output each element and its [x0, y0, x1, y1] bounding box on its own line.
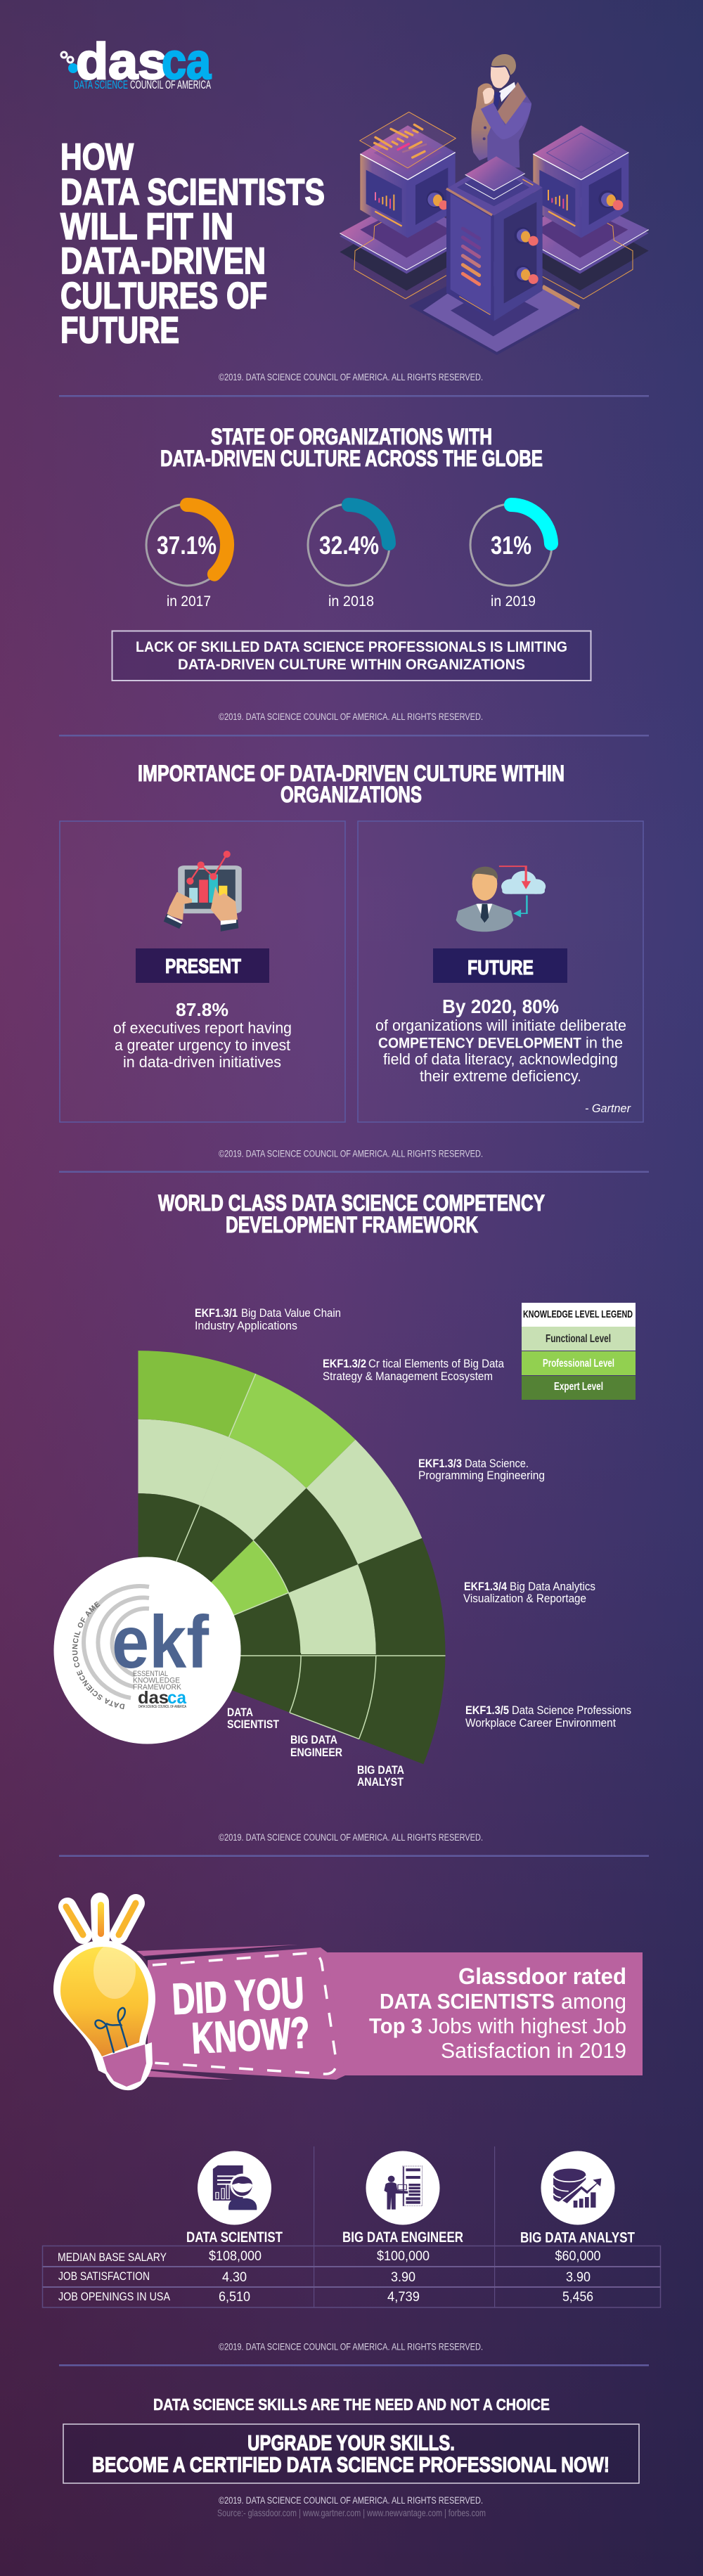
- heading: state of organizations: DATA-DRIVEN CULTURE ACROSS THE GLOBE: [160, 446, 543, 471]
- title: WILL FIT IN: [60, 206, 233, 247]
- sector: EKF1.3/3: [188, 1440, 422, 1628]
- donut: 2017: in 2017: [167, 593, 211, 610]
- did you know text: KNOW?: [191, 2009, 311, 2063]
- table: job comparison: JOB SATISFACTION: [58, 2269, 150, 2283]
- sector: EKF1.3/1: [138, 1351, 256, 1590]
- label: EKF1.3/5: EKF1.3/5: [465, 1704, 509, 1717]
- tagline: DATA SCIENCE SKILLS ARE THE NEED AND NOT A CHOICE: [153, 2395, 550, 2414]
- role labels: BIG DATA: [290, 1733, 337, 1746]
- label: EKF1.3/3: [418, 1457, 545, 1482]
- callout: lack of skilled professionals: LACK OF SKILLED DATA SCIENCE PROFESSIONALS IS LIMITING: [136, 639, 567, 655]
- stat: by 2020, 80%: field of data literacy, acknowledging: [383, 1050, 618, 1068]
- call to action: UPGRADE YOUR SKILLS.: [247, 2430, 455, 2455]
- label: EKF1.3/2: [323, 1358, 505, 1383]
- badge: ekf logo: KNOWLEDGE: [133, 1676, 180, 1685]
- stat: 87.8%: [113, 999, 292, 1071]
- stat: by 2020, 80%: in the: [586, 1033, 623, 1052]
- logo: dasca: ca: [162, 34, 212, 90]
- role labels: SCIENTIST: [227, 1718, 280, 1731]
- callout: lack of skilled professionals: DATA-DRIVEN CULTURE WITHIN ORGANIZATIONS: [178, 657, 525, 673]
- label: EKF1.3/5: Data Science Professions: [512, 1704, 631, 1717]
- label: EKF1.3/5: [465, 1704, 631, 1730]
- right tower: [533, 125, 628, 238]
- role labels: ANALYST: [357, 1775, 404, 1789]
- icon: data scientist: [198, 2151, 271, 2224]
- table: job comparison: $60,000: [555, 2249, 600, 2264]
- fact text: Satisfaction in 2019: [441, 2038, 626, 2063]
- speed lines: [136, 1945, 298, 2080]
- legend: knowledge level: Functional Level: [546, 1333, 611, 1345]
- column headings: BIG DATA ANALYST: [520, 2230, 635, 2246]
- floating data panel: [360, 112, 456, 168]
- title: FUTURE: [60, 309, 179, 352]
- stat: by 2020, 80%: their extreme deficiency.: [420, 1067, 581, 1085]
- badge: ekf logo: ca: [167, 1688, 187, 1708]
- logo: dasca: das: [76, 34, 167, 90]
- fact text: DATA SCIENTISTS: [380, 1989, 555, 2014]
- illustration: data scientist and server towers: [340, 54, 649, 355]
- table: job comparison: [42, 2246, 661, 2307]
- fact text: Glassdoor rated: [458, 1964, 626, 1989]
- stat: by 2020, 80%: By 2020, 80%: [442, 996, 559, 1017]
- label: EKF1.3/2: Cr tical Elements of Big Data: [368, 1358, 505, 1370]
- column headings: DATA SCIENTIST: [186, 2229, 283, 2246]
- right wire: [543, 222, 633, 299]
- role labels: ENGINEER: [290, 1746, 342, 1759]
- legend: knowledge level: KNOWLEDGE LEVEL LEGEND: [523, 1308, 633, 1320]
- label: future: FUTURE: [467, 957, 534, 979]
- label: present: [136, 948, 269, 983]
- label: EKF1.3/5: Workplace Career Environment: [465, 1717, 616, 1730]
- fact text: among: [561, 1989, 626, 2014]
- label: EKF1.3/1: EKF1.3/1: [195, 1307, 238, 1320]
- logo: dasca: DATA SCIENCE: [74, 78, 128, 91]
- table: job comparison: JOB OPENINGS IN USA: [58, 2290, 171, 2303]
- title: HOW: [60, 136, 134, 178]
- left wire: [354, 222, 446, 299]
- heading: importance: ORGANIZATIONS: [280, 782, 422, 807]
- table: job comparison: 4,739: [387, 2290, 420, 2305]
- stat: 87.8%: in data-driven initiatives: [123, 1053, 281, 1071]
- label: EKF1.3/2: EKF1.3/2: [323, 1358, 366, 1370]
- panel: future: [358, 821, 643, 1122]
- copyright: ©2019. DATA SCIENCE COUNCIL OF AMERICA. ALL RIGHTS RESERVED.: [219, 711, 483, 722]
- icon: tablet chart: [164, 851, 242, 932]
- heading: importance: IMPORTANCE OF DATA-DRIVEN CULTURE WITHIN: [138, 761, 565, 786]
- copyright: ©2019. DATA SCIENCE COUNCIL OF AMERICA. ALL RIGHTS RESERVED.: [219, 2494, 483, 2506]
- stat: by 2020, 80%: of organizations will initiate deliberate: [375, 1017, 626, 1034]
- logo: dasca: [61, 34, 212, 91]
- center tower: [446, 156, 543, 321]
- label: EKF1.3/3: Programming Engineering: [418, 1469, 545, 1482]
- badge: ekf logo: ESSENTIAL: [133, 1670, 168, 1678]
- stat: by 2020, 80%: [375, 996, 631, 1115]
- left tower: [360, 125, 456, 238]
- title: DATA SCIENTISTS: [60, 172, 325, 213]
- table: job comparison: 6,510: [219, 2290, 250, 2305]
- title: [60, 136, 325, 352]
- role labels: DATA: [227, 1706, 253, 1719]
- label: present: PRESENT: [165, 955, 241, 978]
- icon: big data analyst: [541, 2151, 614, 2224]
- table: job comparison: 3.90: [391, 2270, 415, 2285]
- label: EKF1.3/4: Visualization & Reportage: [463, 1592, 586, 1605]
- stat: 87.8%: a greater urgency to invest: [115, 1036, 290, 1054]
- label: EKF1.3/3: EKF1.3/3: [418, 1457, 462, 1470]
- ticket tag: [148, 1947, 345, 2080]
- donut: 2018: in 2018: [328, 593, 374, 610]
- label: EKF1.3/2: Strategy & Management Ecosystem: [323, 1370, 493, 1383]
- sector: EKF1.3/4: [204, 1538, 446, 1654]
- left base shadow: [340, 213, 473, 290]
- radial chart: competency wheel: [138, 1351, 446, 1764]
- title: CULTURES OF: [60, 276, 267, 316]
- banner: did you know: [136, 1945, 643, 2080]
- badge: ekf logo: [53, 1557, 240, 1744]
- did you know text: DID YOU: [171, 1969, 305, 2024]
- sector: EKF1.3/5: [204, 1654, 446, 1764]
- donut: 2017: [146, 504, 228, 610]
- table: job comparison: 5,456: [562, 2290, 593, 2305]
- table: job comparison: $100,000: [377, 2249, 430, 2264]
- table: job comparison: 4.30: [222, 2270, 247, 2285]
- table: job comparison: 3.90: [566, 2270, 591, 2285]
- label: EKF1.3/4: [463, 1580, 595, 1605]
- column headings: BIG DATA ENGINEER: [342, 2229, 463, 2246]
- center base: [409, 260, 580, 355]
- label: EKF1.3/1: Big Data Value Chain: [241, 1307, 341, 1320]
- logo: dasca: COUNCIL OF AMERICA: [130, 78, 211, 91]
- label: EKF1.3/1: Industry Applications: [195, 1320, 297, 1332]
- heading: state of organizations: [160, 424, 543, 471]
- donut: 2018: [308, 504, 389, 610]
- copyright: ©2019. DATA SCIENCE COUNCIL OF AMERICA. ALL RIGHTS RESERVED.: [219, 2341, 483, 2352]
- copyright: ©2019. DATA SCIENCE COUNCIL OF AMERICA. ALL RIGHTS RESERVED.: [219, 1147, 483, 1159]
- badge: ekf logo: DATA SCIENCE COUNCIL OF AMERICA: [138, 1705, 186, 1709]
- legend: knowledge level: [522, 1303, 636, 1400]
- stat: 87.8%: of executives report having: [113, 1019, 292, 1036]
- stat: 87.8%: 87.8%: [176, 999, 228, 1020]
- heading: state of organizations: STATE OF ORGANIZATIONS WITH: [211, 424, 492, 449]
- copyright: ©2019. DATA SCIENCE COUNCIL OF AMERICA. ALL RIGHTS RESERVED.: [219, 371, 483, 382]
- scientist figure: [471, 54, 531, 167]
- fact text: Jobs with highest Job: [428, 2014, 626, 2038]
- label: EKF1.3/4: EKF1.3/4: [464, 1580, 508, 1593]
- badge: ekf logo: ekf: [112, 1601, 209, 1684]
- donut: 2019: 31%: [491, 531, 531, 560]
- heading: competency framework: [158, 1190, 545, 1237]
- fact text: Top 3: [369, 2014, 423, 2038]
- right base: [513, 197, 649, 273]
- fact text: [369, 1964, 626, 2063]
- icon: person and cloud: [456, 866, 546, 932]
- legend: knowledge level: Expert Level: [554, 1381, 603, 1393]
- table: job comparison: $108,000: [209, 2249, 262, 2264]
- stat: by 2020, 80%: - Gartner: [585, 1102, 631, 1115]
- donut: 2017: 37.1%: [157, 531, 217, 560]
- sector: EKF1.3/2: [165, 1374, 356, 1605]
- right base shadow: [513, 213, 649, 290]
- callout: lack of skilled professionals: [112, 631, 591, 681]
- title: DATA-DRIVEN: [60, 240, 266, 282]
- heading: competency framework: WORLD CLASS DATA SCIENCE COMPETENCY: [158, 1190, 545, 1216]
- donut: 2018: 32.4%: [319, 531, 379, 560]
- badge: ekf logo: DATA SCIENCE COUNCIL OF AMERICA: [72, 1602, 125, 1710]
- copyright: ©2019. DATA SCIENCE COUNCIL OF AMERICA. ALL RIGHTS RESERVED.: [219, 1831, 483, 1843]
- stat: by 2020, 80%: COMPETENCY DEVELOPMENT: [378, 1035, 581, 1052]
- label: EKF1.3/3: Data Science.: [465, 1457, 529, 1470]
- panel: present: [60, 821, 345, 1122]
- sources: Source:- glassdoor.com | www.gartner.com | www.newvantage.com | forbes.com: [217, 2507, 486, 2518]
- legend: knowledge level: Professional Level: [543, 1358, 614, 1370]
- call to action: [63, 2424, 639, 2483]
- label: EKF1.3/4: Big Data Analytics: [510, 1580, 595, 1593]
- donut: 2019: in 2019: [491, 593, 536, 610]
- donut: 2019: [470, 504, 552, 610]
- heading: importance: [138, 761, 565, 807]
- icon: big data engineer: [366, 2151, 440, 2224]
- label: future: [433, 948, 567, 983]
- badge: ekf logo: das: [138, 1688, 169, 1708]
- label: EKF1.3/1: [195, 1307, 341, 1332]
- column headings: [186, 2229, 635, 2246]
- icon: light bulb: [53, 1902, 155, 2090]
- panel: pink fact ribbon: [327, 1952, 643, 2075]
- table: job comparison: MEDIAN BASE SALARY: [58, 2250, 167, 2264]
- heading: competency framework: DEVELOPMENT FRAMEWORK: [226, 1212, 478, 1237]
- left base: [340, 197, 473, 273]
- role labels: BIG DATA: [357, 1763, 404, 1777]
- badge: ekf logo: FRAMEWORK: [133, 1683, 182, 1692]
- role labels: [227, 1706, 404, 1789]
- did you know text: [171, 1969, 311, 2064]
- dashed stitch: [153, 1953, 336, 2074]
